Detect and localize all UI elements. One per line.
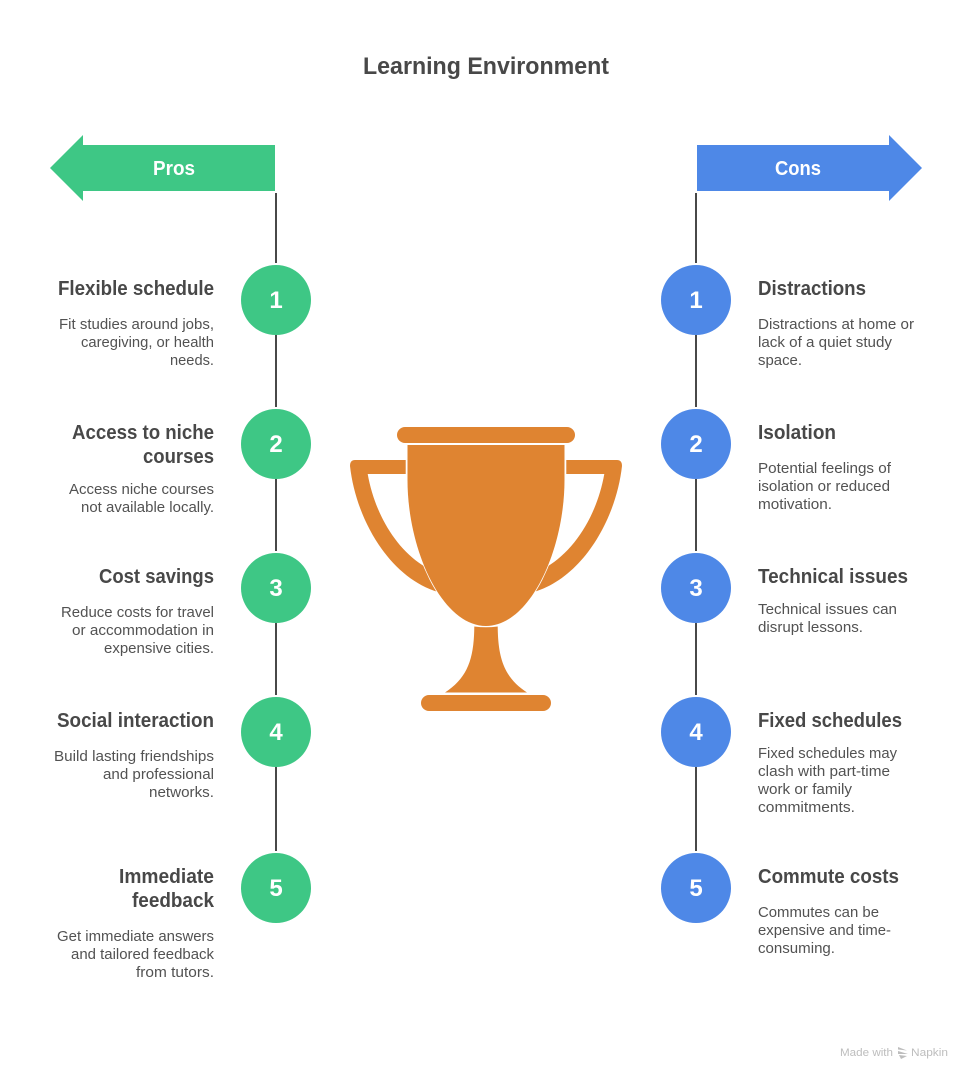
pros item 4: social interaction: 4 (269, 719, 283, 746)
pros item 3: cost savings: 3 (269, 575, 283, 602)
panel: pros (50, 135, 311, 981)
pros item 1: flexible schedule: Flexible schedule (58, 278, 214, 300)
arrow: cons header: Cons (775, 158, 821, 180)
pros item 4: social interaction: networks. (149, 785, 214, 801)
title: Learning Environment (363, 53, 609, 80)
arrow: cons header (697, 135, 922, 201)
pros item 4: social interaction (54, 697, 311, 801)
cons item 1: distractions: space. (758, 353, 802, 369)
cons item 2: isolation: Isolation (758, 422, 836, 444)
panel: cons (661, 135, 922, 957)
pros item 1: flexible schedule: 1 (269, 287, 283, 314)
pros item 5: immediate feedback: and tailored feedback (71, 947, 215, 963)
cons item 4: fixed schedules: commitments. (758, 800, 855, 816)
cons item 5: commute costs: Commutes can be (758, 905, 879, 921)
cons item 5: commute costs (661, 853, 899, 957)
footer: made with napkin: Made with (840, 1047, 893, 1059)
cons item 2: isolation: 2 (689, 431, 703, 458)
cons item 2: isolation: isolation or reduced (758, 479, 890, 495)
cons item 1: distractions (661, 265, 914, 369)
pros item 5: immediate feedback: 5 (269, 875, 283, 902)
pros item 1: flexible schedule (58, 265, 311, 369)
cons item 1: distractions: 1 (689, 287, 703, 314)
cons item 3: technical issues: Technical issues (758, 566, 908, 588)
cons item 3: technical issues: Technical issues can (758, 602, 897, 618)
cons item 4: fixed schedules: Fixed schedules (758, 710, 902, 732)
pros item 5: immediate feedback: Get immediate answers (57, 929, 214, 945)
cons item 5: commute costs: 5 (689, 875, 703, 902)
cons item 3: technical issues (661, 553, 908, 636)
pros item 4: social interaction: Build lasting friendships (54, 749, 214, 765)
pros item 3: cost savings: Cost savings (99, 566, 214, 588)
cons item 4: fixed schedules: Fixed schedules may (758, 746, 898, 762)
pros item 5: immediate feedback (57, 853, 311, 981)
footer: made with napkin: Napkin (911, 1047, 948, 1059)
pros item 2: access to niche courses: not available locally. (81, 500, 214, 516)
cons item 1: distractions: Distractions at home or (758, 317, 914, 333)
pros item 2: access to niche courses: 2 (269, 431, 283, 458)
pros item 2: access to niche courses: courses (143, 446, 214, 468)
pros item 2: access to niche courses: Access to niche (72, 422, 214, 444)
pros item 4: social interaction: and professional (103, 767, 214, 783)
cons item 4: fixed schedules: work or family (757, 782, 853, 798)
cons item 2: isolation: motivation. (758, 497, 832, 513)
cons item 1: distractions: lack of a quiet study (758, 335, 893, 351)
pros item 5: immediate feedback: Immediate (119, 866, 214, 888)
cons item 5: commute costs: Commute costs (758, 866, 899, 888)
arrow: pros header: Pros (153, 158, 195, 180)
pros item 1: flexible schedule: Fit studies around jobs, (59, 317, 214, 333)
arrow: pros header (50, 135, 275, 201)
pros item 5: immediate feedback: from tutors. (136, 965, 214, 981)
cons item 3: technical issues: 3 (689, 575, 703, 602)
icon: trophy (350, 427, 622, 711)
pros item 5: immediate feedback: feedback (132, 890, 215, 912)
cons item 4: fixed schedules: clash with part-time (758, 764, 890, 780)
cons item 3: technical issues: disrupt lessons. (758, 620, 863, 636)
pros item 3: cost savings: or accommodation in (72, 623, 214, 639)
pros item 2: access to niche courses (69, 409, 311, 516)
cons item 4: fixed schedules: 4 (689, 719, 703, 746)
pros item 1: flexible schedule: caregiving, or health (81, 335, 214, 351)
footer: made with napkin (840, 1047, 948, 1059)
cons item 1: distractions: Distractions (758, 278, 866, 300)
pros item 3: cost savings: Reduce costs for travel (61, 605, 214, 621)
pros item 4: social interaction: Social interaction (57, 710, 214, 732)
cons item 5: commute costs: expensive and time- (758, 923, 891, 939)
cons item 2: isolation: Potential feelings of (758, 461, 892, 477)
cons item 5: commute costs: consuming. (758, 941, 835, 957)
pros item 2: access to niche courses: Access niche courses (69, 482, 214, 498)
pros item 3: cost savings (61, 553, 311, 657)
pros item 3: cost savings: expensive cities. (104, 641, 214, 657)
cons item 2: isolation (661, 409, 892, 513)
cons item 4: fixed schedules (661, 697, 902, 816)
pros item 1: flexible schedule: needs. (170, 353, 214, 369)
